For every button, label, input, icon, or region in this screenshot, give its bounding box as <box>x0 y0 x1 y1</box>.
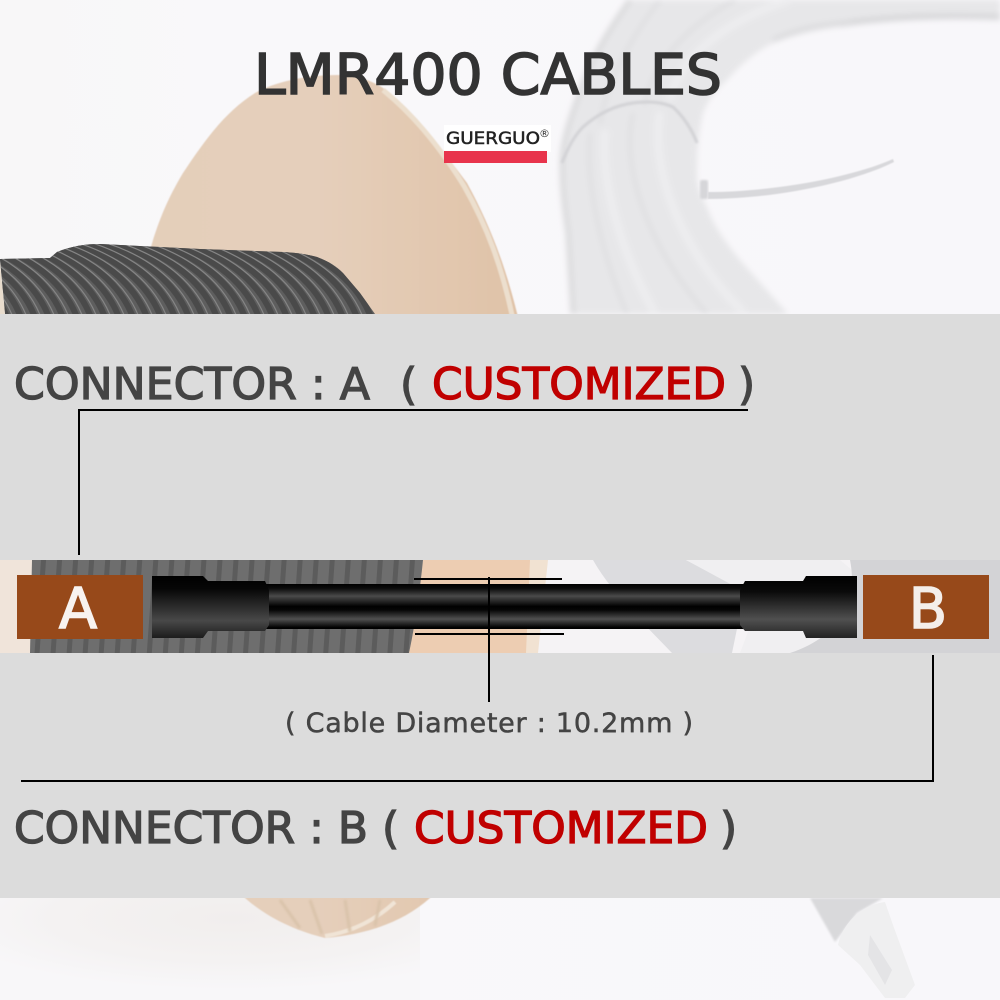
bundled cable coil <box>562 0 1000 314</box>
label box A: A <box>59 577 97 642</box>
title: LMR400 CABLES <box>254 43 722 108</box>
wood in strip <box>409 560 542 653</box>
leader line: connector A <box>79 410 748 555</box>
label box B <box>863 575 989 642</box>
tie head <box>700 180 708 199</box>
spool shadow <box>0 898 420 1000</box>
plywood rim <box>383 90 525 360</box>
cable tie tail <box>708 159 894 199</box>
diameter markers <box>414 577 564 702</box>
connector end in lower photo <box>810 898 915 998</box>
flange sliver beside drum <box>0 262 5 314</box>
logo <box>444 125 551 163</box>
heading: connector B: CUSTOMIZED <box>414 803 708 854</box>
wooden spool <box>130 75 548 938</box>
heading: connector B: CONNECTOR : B <box>14 803 368 854</box>
grey content panel <box>0 314 1000 898</box>
heading: connector B: ( <box>382 803 399 854</box>
leader line: connector B <box>21 655 933 781</box>
heading: connector A: CONNECTOR : A <box>14 359 370 410</box>
photo strip <box>0 560 1000 653</box>
heading: connector B <box>14 803 737 854</box>
heading: connector A: ( <box>400 359 417 410</box>
heading: connector B: ) <box>720 803 737 854</box>
left connector <box>152 576 269 638</box>
cable diameter label: ( Cable Diameter : 10.2mm ) <box>285 708 693 739</box>
tie around bundle <box>562 102 697 163</box>
logo: GUERGUO <box>446 129 540 149</box>
right connector <box>740 576 857 638</box>
flange edge <box>0 560 32 653</box>
logo: ® <box>539 127 550 140</box>
coil stripes in strip <box>30 560 423 653</box>
cable assembly <box>152 576 857 638</box>
label box A <box>17 575 143 642</box>
heading: connector A <box>14 359 755 410</box>
cable body <box>266 584 744 629</box>
heading: connector A: CUSTOMIZED <box>432 359 726 410</box>
heading: connector A: ) <box>738 359 755 410</box>
wood grain at bottom <box>280 900 380 934</box>
cable drum, upper <box>0 244 375 314</box>
grey cable bands in strip <box>593 560 745 653</box>
label box B: B <box>909 577 947 642</box>
